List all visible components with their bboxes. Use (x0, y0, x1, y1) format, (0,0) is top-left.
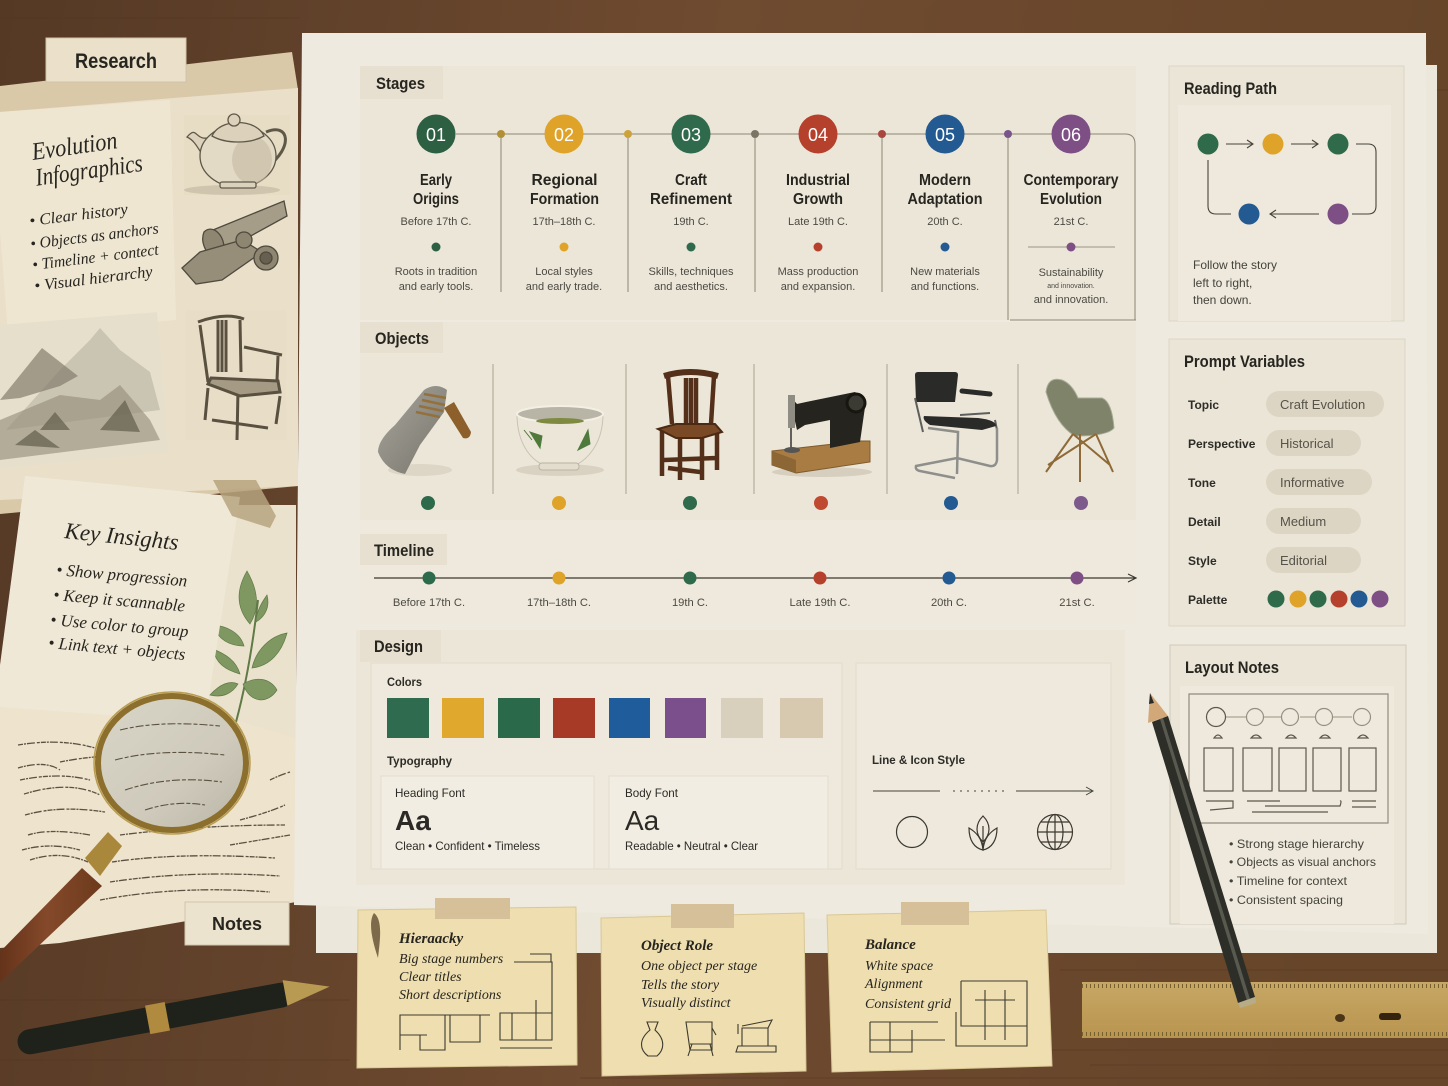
timeline labels: 19th C. (672, 597, 708, 609)
stage 01: and early tools. (399, 281, 473, 293)
row: Perspective: Historical (1280, 436, 1334, 451)
ruler (1082, 982, 1448, 1038)
sketch card: mountain landscape (0, 312, 168, 468)
object: sewing machine (772, 392, 872, 477)
layout bullet notes (1229, 837, 1376, 907)
card: body font: Readable • Neutral • Clear (625, 839, 758, 853)
object: dark wood chair (658, 372, 722, 480)
sticky note: Object Role: One object per stage (641, 959, 757, 974)
small paper with leaf illustration (195, 505, 296, 738)
sub-panel: colors and typography: Typography (387, 754, 452, 768)
timeline arrow (374, 574, 1136, 582)
sticky note: Hierarchy: Hieraacky (398, 931, 463, 947)
stage 04: Late 19th C. (788, 216, 848, 228)
row: Tone (1188, 469, 1372, 495)
handwritten note: Evolution Infographics: Evolution (29, 127, 119, 166)
sticky note: Balance: White space (865, 959, 933, 974)
main sheet back layer (316, 65, 1437, 953)
layout bullet notes: • Strong stage hierarchy (1229, 837, 1364, 851)
sticky note: Object Role: Visually distinct (641, 996, 732, 1011)
timeline labels: 20th C. (931, 597, 967, 609)
object: tea bowl (516, 406, 604, 476)
tab: Research (46, 38, 186, 82)
stage 04: Industrial (786, 172, 850, 189)
card: heading font (381, 776, 594, 869)
reading path caption: left to right, (1193, 276, 1252, 290)
reading path caption (1193, 258, 1277, 307)
stage 02: 17th–18th C. (532, 216, 596, 228)
timeline markers (422, 572, 1084, 584)
tab: Objects (360, 322, 443, 353)
stage 01: Before 17th C. (401, 216, 471, 228)
grid sketch (870, 981, 1027, 1052)
stage 01: 01 (426, 125, 446, 145)
panel: Prompt Variables: Prompt Variables (1184, 352, 1305, 371)
handwritten card: Key Insights: • Show progression (56, 560, 188, 590)
stage 03: Craft (675, 172, 708, 189)
panel: Reading Path: Reading Path (1184, 79, 1277, 98)
handwritten bullet list: • Visual hierarchy (33, 263, 155, 295)
timeline labels: Before 17th C. (393, 597, 465, 609)
stage 01: Origins (413, 191, 459, 208)
panel: Layout Notes (1170, 645, 1406, 924)
tab: Timeline (360, 534, 447, 565)
handwritten card: Key Insights (0, 476, 240, 722)
stage 01: Roots in tradition (395, 266, 477, 278)
stage 05: 05 (935, 125, 955, 145)
row: Tone: Tone (1188, 476, 1216, 490)
stage 06: and innovation. (1047, 283, 1095, 290)
fountain pen (15, 972, 332, 1058)
stage 01: Early (420, 172, 452, 189)
sketch: cannon (182, 201, 287, 284)
object: tubular steel chair (915, 372, 997, 478)
icon: sewing machine sketch (736, 1020, 776, 1052)
sticky note: Object Role (601, 904, 806, 1076)
sticky note: Hierarchy: Clear titles (399, 970, 462, 985)
stage 06: Contemporary (1024, 172, 1119, 189)
sticky note: Balance: Balance (864, 937, 916, 953)
row: Style: Editorial (1280, 553, 1327, 568)
row: Detail: Detail (1188, 515, 1221, 529)
icon: green leaf branch (210, 571, 287, 722)
wireframe sketch (400, 954, 552, 1050)
sketch: teapot (184, 114, 285, 195)
handwritten note: Evolution Infographics (29, 124, 144, 192)
letter paper with handwriting (0, 690, 298, 948)
row: Detail: Medium (1280, 514, 1326, 529)
tab: Objects: Objects (375, 329, 429, 348)
reading path caption: Follow the story (1193, 258, 1277, 272)
stage 06: Evolution (1040, 191, 1102, 208)
timeline labels: 17th–18th C. (527, 597, 591, 609)
stage 06: 21st C. (1054, 216, 1088, 228)
stage 04: and expansion. (781, 281, 855, 293)
stage 03: Skills, techniques (648, 266, 734, 278)
panel: Layout Notes: Layout Notes (1185, 658, 1279, 677)
layout bullet notes: • Objects as visual anchors (1229, 855, 1376, 869)
icon: leaf (969, 816, 997, 850)
stage 01 (395, 114, 477, 293)
handwritten bullet list (28, 201, 160, 295)
sticky note: Hierarchy: Short descriptions (399, 988, 502, 1003)
sticky note: Hierarchy (357, 898, 577, 1068)
row: Palette: Palette (1188, 593, 1228, 607)
tab: Research: Research (75, 50, 157, 73)
layout bullet notes: • Consistent spacing (1229, 893, 1343, 907)
connector dots (497, 130, 1012, 138)
stage 06: Sustainability (1039, 267, 1104, 279)
stage 03: and aesthetics. (654, 281, 728, 293)
card: body font: Aa (625, 805, 660, 836)
pencil (1148, 693, 1256, 1008)
sticky note: Balance (827, 902, 1052, 1072)
row: Palette (1188, 590, 1388, 608)
colour swatches (387, 698, 823, 738)
icon: globe (1038, 814, 1072, 850)
card: body font (609, 776, 828, 869)
sticky note: Hierarchy: Big stage numbers (399, 952, 504, 967)
left research paper stack (0, 52, 298, 514)
stage 05: New materials (910, 266, 980, 278)
row: Topic: Craft Evolution (1280, 397, 1365, 412)
stage 06: and innovation. (1034, 294, 1108, 306)
main sheet (294, 33, 1428, 934)
stage 04: Growth (793, 191, 843, 208)
stage 03: 19th C. (673, 216, 709, 228)
stage 04: Mass production (778, 266, 858, 278)
row: Perspective (1188, 430, 1361, 456)
row: Topic: Topic (1188, 398, 1219, 412)
magnifying glass (0, 692, 250, 990)
object: molded plastic chair (1046, 379, 1114, 482)
tab: Timeline: Timeline (374, 541, 434, 560)
stage 02: Local styles (535, 266, 593, 278)
stage 03 (648, 114, 734, 293)
stage 05: and functions. (911, 281, 979, 293)
masking tape (213, 480, 276, 528)
sticky note: Object Role: Object Role (641, 938, 713, 954)
stage 04: 04 (808, 125, 828, 145)
icon: circle (896, 816, 928, 848)
stage 06: 06 (1061, 125, 1081, 145)
icon: chair sketch (686, 1022, 716, 1056)
handwritten card: Key Insights: Key Insights (62, 518, 180, 555)
panel: Prompt Variables (1169, 339, 1405, 626)
stage 02: Formation (530, 191, 599, 208)
handwritten bullet list: • Timeline + contect (31, 242, 160, 274)
icon: vase sketch (642, 1022, 663, 1056)
tab: Design (360, 630, 441, 662)
stage 03: 03 (681, 125, 701, 145)
panel: Design (356, 630, 1125, 885)
timeline labels (393, 597, 1095, 609)
stage 05: Modern (919, 172, 971, 189)
stage 05 (908, 114, 982, 293)
layout bullet notes: • Timeline for context (1229, 874, 1348, 888)
panel: Timeline (360, 520, 1136, 624)
panel: Objects (360, 322, 1136, 520)
handwritten note: Evolution Infographics: Infographics (33, 150, 144, 192)
row: Style (1188, 547, 1361, 573)
reading path diagram (1198, 134, 1376, 224)
handwritten card: Key Insights: • Link text + objects (48, 633, 187, 664)
handwritten card: Key Insights: • Keep it scannable (53, 585, 186, 616)
stage connector lines (456, 134, 1136, 320)
timeline labels: 21st C. (1059, 597, 1095, 609)
object: stone axe (378, 386, 471, 476)
row: Style: Style (1188, 554, 1217, 568)
tab: Notes (185, 902, 289, 945)
object color dots (421, 496, 1088, 510)
handwritten bullet list: • Objects as anchors (29, 220, 160, 253)
sub-panel: line and icon style: Line & Icon Style (872, 753, 965, 767)
stage 05: Adaptation (908, 191, 982, 208)
row: Tone: Informative (1280, 475, 1344, 490)
card: heading font: Aa (395, 805, 431, 836)
sticky note: Balance: Consistent grid (865, 997, 952, 1012)
sticky note: Object Role: Tells the story (641, 978, 720, 993)
row: Perspective: Perspective (1188, 437, 1256, 451)
handwritten card: Key Insights: • Use color to group (50, 610, 189, 641)
sub-panel: colors and typography (371, 663, 842, 869)
layout wireframe sketch (1189, 694, 1388, 823)
stage 02: and early trade. (526, 281, 602, 293)
card: body font: Body Font (625, 786, 679, 800)
tab: Notes: Notes (212, 914, 262, 934)
timeline labels: Late 19th C. (790, 597, 850, 609)
tab: Stages: Stages (376, 74, 425, 93)
row: Topic (1188, 391, 1384, 417)
sub-panel: colors and typography: Colors (387, 675, 422, 689)
sticky note: Balance: Alignment (864, 977, 924, 992)
row: Detail (1188, 508, 1361, 534)
card: heading font: Clean • Confident • Timeless (395, 839, 540, 853)
card: heading font: Heading Font (395, 786, 466, 800)
panel: Stages (360, 66, 1136, 320)
handwritten bullet list: • Clear history (28, 201, 130, 230)
tab: Stages (360, 66, 443, 99)
stage 02: Regional (532, 172, 598, 189)
panel: Reading Path (1169, 66, 1404, 321)
sub-panel: line and icon style (856, 663, 1111, 869)
tab: Design: Design (374, 637, 423, 656)
stage 02 (526, 114, 602, 293)
stage 03: Refinement (650, 191, 733, 208)
stage 05: 20th C. (927, 216, 963, 228)
stage 04 (778, 114, 858, 293)
stage 06 (1024, 114, 1119, 306)
reading path caption: then down. (1193, 293, 1252, 307)
sketch: wooden chair (198, 316, 282, 440)
stage 02: 02 (554, 125, 574, 145)
